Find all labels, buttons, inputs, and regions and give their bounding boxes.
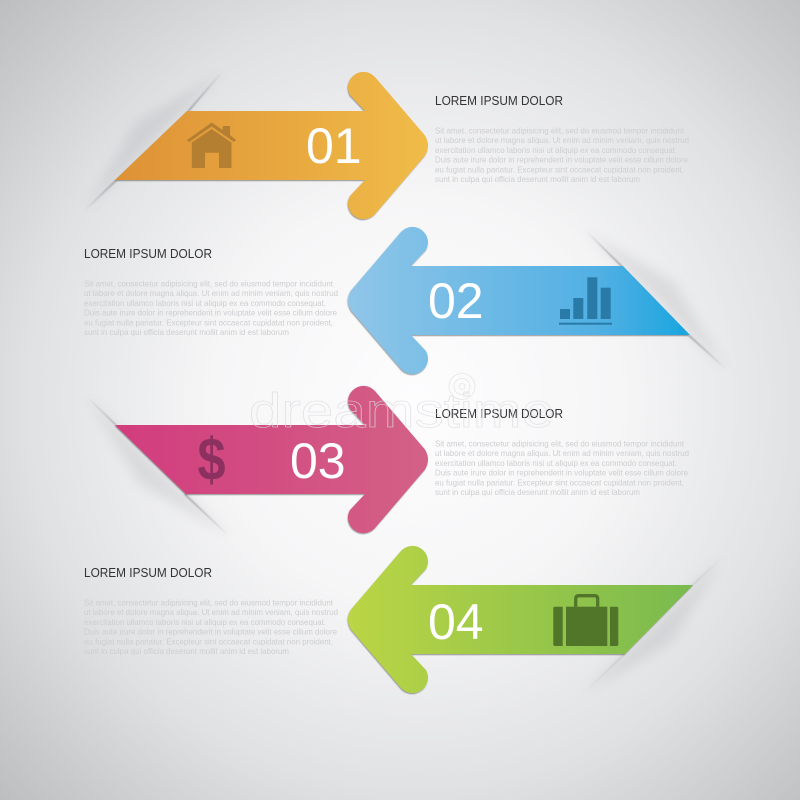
body text 2	[84, 278, 338, 337]
body text 1: sunt in culpa qui officia deserunt mollit anim id est laborum	[435, 174, 640, 184]
body text 4: exercitation ullamco laboris nisi ut aliquip ex ea commodo consequat.	[84, 617, 326, 627]
soft fold tint on the outer side of each cut	[85, 72, 726, 693]
body text 1: Sit amet, consectetur adipisicing elit, sed do eiusmod tempor incididunt	[435, 126, 685, 136]
heading 3: LOREM IPSUM DOLOR	[435, 407, 563, 421]
body text 3: Sit amet, consectetur adipisicing elit, sed do eiusmod tempor incididunt	[435, 438, 685, 448]
body text 3	[435, 438, 689, 497]
arrow 3: pink, pointing right	[115, 386, 428, 533]
body text 1: eu fugiat nulla pariatur. Excepteur sint occaecat cupidatat non proident,	[435, 164, 684, 174]
icon: dollar sign: $	[197, 426, 226, 493]
body text 2: sunt in culpa qui officia deserunt mollit anim id est laborum	[84, 327, 289, 337]
body text 4: eu fugiat nulla pariatur. Excepteur sint occaecat cupidatat non proident,	[84, 636, 333, 646]
number 03: 03	[290, 433, 346, 489]
body text 1: Duis aute irure dolor in reprehenderit in voluptate velit esse cillum dolore	[435, 155, 688, 165]
body text 1: ut labore et dolore magna aliqua. Ut enim ad minim veniam, quis nostrud	[435, 135, 689, 145]
body text 2: Sit amet, consectetur adipisicing elit, sed do eiusmod tempor incididunt	[84, 278, 334, 288]
heading 1: LOREM IPSUM DOLOR	[435, 94, 563, 108]
body text 2: ut labore et dolore magna aliqua. Ut enim ad minim veniam, quis nostrud	[84, 288, 338, 298]
arrow 2: blue, pointing left	[348, 227, 690, 374]
heading 4: LOREM IPSUM DOLOR	[84, 566, 212, 580]
arrow 4: green, pointing left	[348, 546, 693, 693]
body text 2: exercitation ullamco laboris nisi ut aliquip ex ea commodo consequat.	[84, 298, 326, 308]
body text 4: sunt in culpa qui officia deserunt mollit anim id est laborum	[84, 646, 289, 656]
body text 2: Duis aute irure dolor in reprehenderit in voluptate velit esse cillum dolore	[84, 308, 337, 318]
body text 1: exercitation ullamco laboris nisi ut aliquip ex ea commodo consequat.	[435, 145, 677, 155]
text block 3	[435, 407, 689, 497]
text block 2	[84, 247, 338, 337]
body text 4: ut labore et dolore magna aliqua. Ut enim ad minim veniam, quis nostrud	[84, 607, 338, 617]
body text 1	[435, 126, 689, 184]
icon: bar chart	[559, 277, 612, 325]
number 04: 04	[428, 594, 484, 650]
body text 3: sunt in culpa qui officia deserunt mollit anim id est laborum	[435, 487, 640, 497]
arrow 1: orange, pointing right	[115, 72, 428, 219]
number 01: 01	[306, 118, 362, 174]
number 02: 02	[428, 273, 484, 329]
icon: house	[187, 122, 236, 168]
body text 4: Sit amet, consectetur adipisicing elit, sed do eiusmod tempor incididunt	[84, 598, 334, 608]
watermark: dreamstime	[249, 385, 554, 438]
heading 2: LOREM IPSUM DOLOR	[84, 247, 212, 261]
body text 3: eu fugiat nulla pariatur. Excepteur sint occaecat cupidatat non proident,	[435, 477, 684, 487]
body text 4	[84, 598, 338, 656]
body text 4: Duis aute irure dolor in reprehenderit in voluptate velit esse cillum dolore	[84, 627, 337, 637]
text block 4	[84, 566, 338, 656]
icon: briefcase	[553, 596, 618, 646]
text block 1	[435, 94, 689, 184]
watermark	[249, 374, 554, 438]
fold shadows beside the arrow bands	[85, 72, 726, 693]
body text 3: exercitation ullamco laboris nisi ut aliquip ex ea commodo consequat.	[435, 458, 677, 468]
body text 3: Duis aute irure dolor in reprehenderit in voluptate velit esse cillum dolore	[435, 468, 688, 478]
body text 3: ut labore et dolore magna aliqua. Ut enim ad minim veniam, quis nostrud	[435, 448, 689, 458]
body text 2: eu fugiat nulla pariatur. Excepteur sint occaecat cupidatat non proident,	[84, 317, 333, 327]
